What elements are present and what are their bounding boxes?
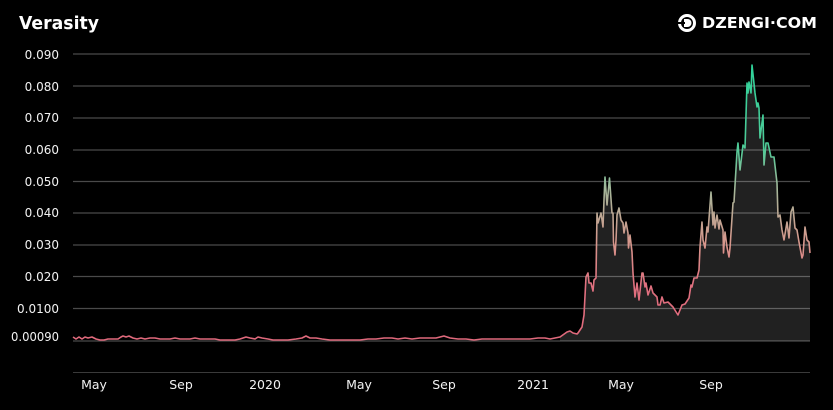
y-axis labels: 0.040	[25, 206, 59, 220]
y-axis labels: 0.0100	[17, 302, 59, 316]
x-axis labels	[81, 377, 723, 392]
price line	[73, 65, 810, 340]
y-axis labels: 0.060	[25, 143, 59, 157]
x-axis labels: May	[608, 377, 635, 392]
x-axis labels: 2020	[249, 377, 281, 392]
title: Verasity	[19, 13, 99, 34]
x-axis labels: May	[346, 377, 373, 392]
y-axis labels: 0.00090	[11, 330, 59, 344]
chart: price gridlines	[73, 54, 810, 341]
icon: logo mark	[678, 16, 694, 30]
y-axis labels: 0.090	[25, 48, 59, 62]
logo: dzengi.com	[678, 14, 817, 32]
logo wordmark: DZENGI·COM	[702, 14, 817, 32]
y-axis labels: 0.070	[25, 111, 59, 125]
y-axis labels: 0.020	[25, 270, 59, 284]
x-axis labels: May	[81, 377, 108, 392]
y-axis labels: 0.080	[25, 80, 59, 94]
x-axis line	[73, 372, 810, 374]
y-axis labels: 0.030	[25, 238, 59, 252]
y-axis labels	[11, 48, 59, 344]
y-axis labels: 0.050	[25, 175, 59, 189]
x-axis labels: Sep	[169, 377, 193, 392]
x-axis labels: Sep	[699, 377, 723, 392]
area under price line	[560, 65, 810, 341]
x-axis labels: 2021	[517, 377, 549, 392]
x-axis labels: Sep	[432, 377, 456, 392]
